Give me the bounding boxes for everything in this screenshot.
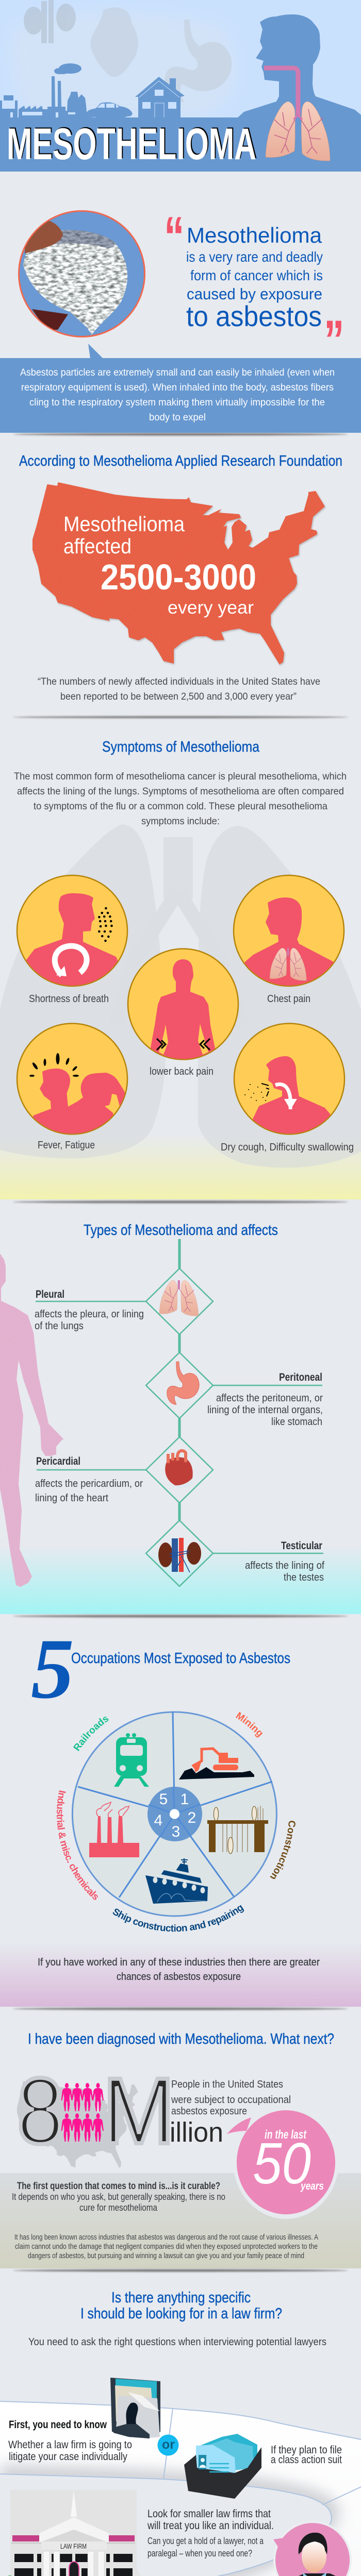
text: first, you need to know: Whether a law firm is going to [8, 2439, 132, 2451]
wheel numbers: 1 [180, 1791, 189, 1808]
symptom: shortness of breath: Shortness of breath [29, 993, 109, 1005]
symptoms intro text: affects the lining of the lungs. Symptoms of mesothelioma are often compared [17, 786, 344, 797]
blue title band [0, 117, 361, 172]
quote text: to asbestos [186, 300, 322, 332]
silhouette: man breathing [237, 14, 361, 118]
map quote: “The numbers of newly affected individuals in the United States have [38, 676, 320, 687]
section shadow [13, 716, 348, 718]
icon: construction [207, 1806, 268, 1854]
wheel numbers: 5 [159, 1791, 168, 1808]
text: smaller law firms [147, 2508, 274, 2558]
heading: law firm: I should be looking for in a law firm? [80, 2306, 282, 2322]
symptom: shortness of breath [17, 875, 127, 1005]
background lungs [0, 824, 361, 1168]
section shadow [13, 2007, 348, 2010]
ring labels [57, 1711, 296, 1932]
map quote: been reported to be between 2,500 and 3,000 every year” [60, 691, 297, 702]
section shadow [13, 1200, 348, 1204]
US map statistic: affected [63, 534, 132, 558]
curable question: The first question that comes to mind is...is it curable? [17, 2181, 220, 2192]
curable question: cure for mesothelioma [79, 2202, 158, 2213]
negligence note [14, 2233, 318, 2260]
road [0, 2401, 361, 2576]
US map statistic: Mesothelioma [63, 512, 185, 536]
quote text: form of cancer which is [190, 267, 323, 283]
type: pericardial: lining of the heart [35, 1493, 108, 1504]
ring labels: Industrial & misc. chemicals [57, 1790, 98, 1900]
law firm intro: You need to ask the right questions when interviewing potential lawyers [28, 2336, 326, 2348]
icon: law firm building: LAW FIRM [60, 2542, 87, 2550]
symptom: fever, fatigue [17, 1023, 127, 1151]
US map statistic [32, 482, 326, 666]
ring labels: Railroads [73, 1717, 108, 1751]
quote text [186, 223, 323, 332]
title: MESOTHELIOMA [8, 118, 257, 168]
title [7, 118, 257, 169]
type: peritoneal [146, 1352, 323, 1428]
statistic text [171, 2079, 291, 2117]
heading: law firm: Is there anything specific [111, 2290, 251, 2306]
statistic text: asbestos exposure [171, 2106, 247, 2117]
wheel numbers: 3 [172, 1823, 180, 1840]
occupations note: chances of asbestos exposure [117, 1971, 241, 1982]
type: pericardial: Pericardial [36, 1455, 80, 1467]
US map statistic: every year [168, 598, 254, 618]
US map statistic: 2500-3000 [101, 557, 256, 597]
ring labels: Mining [236, 1711, 263, 1737]
quote text: caused by exposure [187, 285, 322, 303]
occupations note [38, 1957, 320, 1982]
statistic text: People in the United States [171, 2079, 283, 2090]
quote text: is a very rare and deadly [186, 249, 323, 265]
type: peritoneal: like stomach [271, 1416, 322, 1428]
symptom: dry cough: Dry cough, Difficulty swallowing [221, 1142, 354, 1153]
law firm panel [0, 2290, 361, 2576]
curable question: It depends on who you ask, but generally speaking, there is no [12, 2192, 225, 2202]
callout: asbestos inhalation [0, 344, 361, 433]
heading: types: Types of Mesothelioma and affects [84, 1222, 278, 1239]
type: testicular: affects the lining of [245, 1560, 324, 1571]
section shadow [13, 433, 348, 436]
text: smaller law firms: paralegal – when you need one? [147, 2548, 252, 2558]
statistic: 8 million: 8 [17, 2058, 63, 2163]
wheel numbers: 4 [154, 1812, 162, 1829]
ring labels: Ship construction and repairing [112, 1905, 244, 1932]
type: pericardial: affects the pericardium, or [35, 1478, 143, 1489]
icon: excavator [179, 1749, 254, 1780]
faded organ: stomach [165, 20, 232, 102]
text: smaller law firms: Can you get a hold of a lawyer, not a [147, 2536, 264, 2546]
type: peritoneal: Peritoneal [279, 1371, 322, 1383]
icon: trachea [264, 68, 298, 116]
wheel numbers: 2 [188, 1809, 196, 1826]
ring labels: Construction [270, 1821, 296, 1879]
photo of asbestos fibers [19, 211, 144, 337]
text: class action [271, 2444, 342, 2466]
symptoms intro text: The most common form of mesothelioma cancer is pleural mesothelioma, which [14, 771, 347, 782]
symptoms intro text: to symptoms of the flu or a common cold. These pleural mesothelioma [34, 801, 327, 812]
timeline connector [178, 1239, 180, 1520]
icon: case folder [110, 2378, 160, 2438]
intro quote panel [18, 210, 341, 337]
icon: train [114, 1733, 149, 1787]
skyline [0, 63, 185, 118]
icon: factory [89, 1802, 139, 1857]
diagnosed panel [0, 2031, 361, 2268]
type: pleural: Pleural [36, 1289, 64, 1300]
map quote [38, 676, 320, 702]
bubble: last 50 years [227, 2106, 338, 2219]
faded organ: kidneys [24, 0, 76, 43]
text: first, you need to know [8, 2419, 132, 2463]
type: testicular [146, 1520, 324, 1586]
close quote mark: ” [324, 309, 344, 372]
symptom: chest pain [234, 875, 344, 1005]
symptom: lower back pain: lower back pain [150, 1066, 214, 1077]
open quote mark: “ [164, 205, 185, 268]
grey band [0, 2173, 361, 2268]
bubble: last 50 years: years [300, 2180, 324, 2192]
bubble: lawyer [273, 2521, 352, 2576]
symptoms intro text: symptoms include: [141, 816, 220, 827]
text: class action: a class action suit [271, 2454, 342, 2466]
type: pleural [35, 1268, 213, 1334]
type: peritoneal: lining of the internal organs, [207, 1404, 323, 1416]
human body silhouette [0, 1253, 63, 1587]
grey US map [17, 2080, 138, 2168]
symptoms panel [0, 739, 361, 1199]
text: smaller law firms: will treat you like an individual. [147, 2520, 274, 2532]
types panel [0, 1222, 361, 1614]
callout: asbestos inhalation: Asbestos particles are extremely small and can easily be inhaled (even when [20, 367, 335, 378]
wheel numbers [154, 1791, 196, 1840]
occupations note: If you have worked in any of these industries then there are greater [38, 1957, 320, 1968]
text: smaller law firms: Look for smaller law firms that [147, 2508, 271, 2520]
statistic: 8 million: M [103, 2058, 175, 2163]
heading: law firm [80, 2290, 282, 2322]
symptom: lower back pain [128, 949, 238, 1077]
type: peritoneal: affects the peritoneum, or [216, 1393, 323, 1404]
text: first, you need to know: First, you need to know [9, 2419, 107, 2431]
curable question [12, 2181, 225, 2213]
badge: or: or [162, 2437, 175, 2452]
text: class action: If they plan to file [271, 2444, 342, 2456]
symptom: dry cough [221, 1023, 354, 1153]
section shadow [13, 2269, 348, 2272]
heading: occupations: Occupations Most Exposed to Asbestos [71, 1650, 290, 1667]
statistic: 8 million: illion [170, 2117, 223, 2148]
callout: asbestos inhalation: cling to the respiratory system making them virtually impossible for the [29, 397, 325, 408]
statistic text: were subject to occupational [171, 2094, 291, 2106]
symptom: chest pain: Chest pain [267, 993, 310, 1005]
occupation wheel [57, 1711, 296, 1932]
section shadow [13, 1615, 348, 1618]
quote text: Mesothelioma [187, 223, 322, 247]
bubble: last 50 years: in the last [265, 2128, 307, 2142]
callout: asbestos inhalation: respiratory equipment is used). When inhaled into the body, asbestos fibers [21, 382, 334, 393]
negligence note: dangers of asbestos, but pursuing and winning a lawsuit can give you and your family peace of mind [28, 2251, 304, 2260]
type: pleural: affects the pleura, or lining [35, 1309, 144, 1320]
header panel [0, 0, 361, 172]
symptoms intro text [14, 771, 347, 827]
icon: people [61, 2083, 104, 2142]
text: first, you need to know: litigate your case individually [9, 2451, 127, 2463]
title: MESOTHELIOMA [7, 120, 256, 169]
icon: law firm building [5, 2490, 146, 2576]
icon: lungs [266, 101, 330, 161]
bubble: last 50 years: 50 [253, 2131, 311, 2196]
faded organ: heart [90, 7, 138, 77]
type: pleural: of the lungs [35, 1320, 84, 1332]
statistic: 8 million [17, 2058, 223, 2163]
icon: ship [145, 1858, 208, 1904]
icon: car and house windows [2, 90, 176, 117]
type: testicular: the testes [284, 1572, 324, 1583]
badge: or [158, 2435, 178, 2455]
heading: symptoms: Symptoms of Mesothelioma [102, 739, 260, 755]
icon: file box [184, 2434, 261, 2499]
type: pericardial [35, 1437, 213, 1504]
big number 5: 5 [31, 1621, 74, 1717]
icon: tree [5, 2575, 18, 2576]
callout: asbestos inhalation: body to expel [149, 412, 206, 423]
symptom: fever, fatigue: Fever, Fatigue [38, 1140, 95, 1151]
occupations panel [0, 1621, 361, 2007]
type: testicular: Testicular [281, 1540, 322, 1552]
